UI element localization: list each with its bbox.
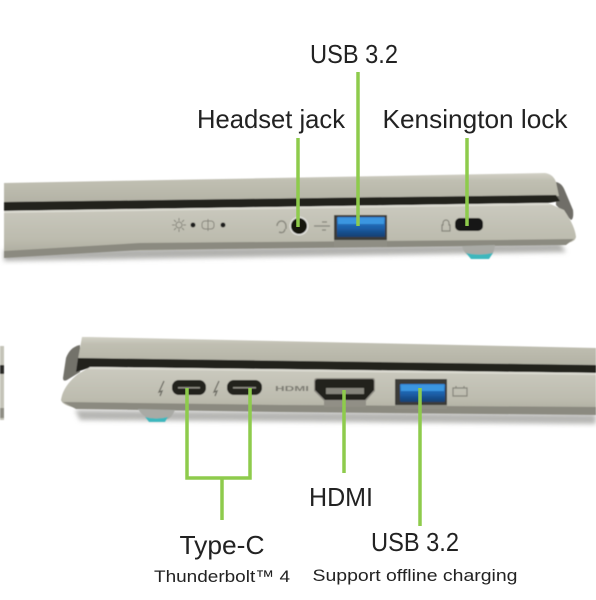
usb symbol: [314, 222, 330, 230]
indicator icons: [172, 218, 226, 232]
lock icon: [442, 220, 450, 231]
label: USB 3.2 top: USB 3.2: [310, 39, 398, 69]
keyboard gap: [76, 358, 596, 373]
USB-A port: [334, 215, 387, 247]
label: Support offline charging: Support offline charging: [312, 566, 518, 585]
base: [61, 367, 596, 412]
HDMI port: [314, 378, 375, 407]
USB-A port: [395, 379, 447, 409]
Type-C port 2: [227, 380, 262, 395]
keyboard gap: [4, 195, 560, 211]
hinge: [63, 345, 80, 381]
label: Thunderbolt 4: Thunderbolt™ 4: [154, 567, 290, 586]
HDMI label: HDMI: [275, 386, 309, 393]
label: Kensington lock: Kensington lock: [382, 104, 569, 134]
hinge: [556, 182, 573, 220]
line: HDMI: [342, 390, 346, 473]
Kensington slot: [455, 218, 483, 231]
rubber foot: [138, 409, 175, 422]
callout lines: [187, 72, 467, 526]
label: Type-C: Type-C: [180, 530, 264, 560]
line: USB top: [356, 72, 360, 226]
line: Kensington: [465, 138, 469, 226]
lid: [78, 337, 596, 365]
laptop: bottom side view: [0, 337, 596, 424]
lid: [4, 173, 559, 203]
headset icon: [277, 221, 286, 233]
label: HDMI: HDMI: [309, 482, 373, 512]
shadow under top laptop: [4, 243, 566, 261]
Type-C port 1: [172, 380, 206, 395]
thunderbolt icons: [159, 381, 219, 396]
label: Headset jack: Headset jack: [197, 104, 346, 134]
base: [4, 203, 576, 253]
rubber foot: [462, 245, 495, 259]
laptop: top side view: [4, 173, 576, 261]
offline charging icon: [453, 386, 467, 396]
cropped fragment at left edge: [0, 346, 4, 420]
headset jack: [290, 216, 308, 236]
line: USB bottom: [418, 388, 422, 526]
bracket: Type-C: [187, 388, 250, 520]
shadow under bottom laptop: [75, 410, 596, 424]
label: USB 3.2 bottom: USB 3.2: [371, 527, 459, 557]
line: headset jack: [296, 138, 300, 227]
